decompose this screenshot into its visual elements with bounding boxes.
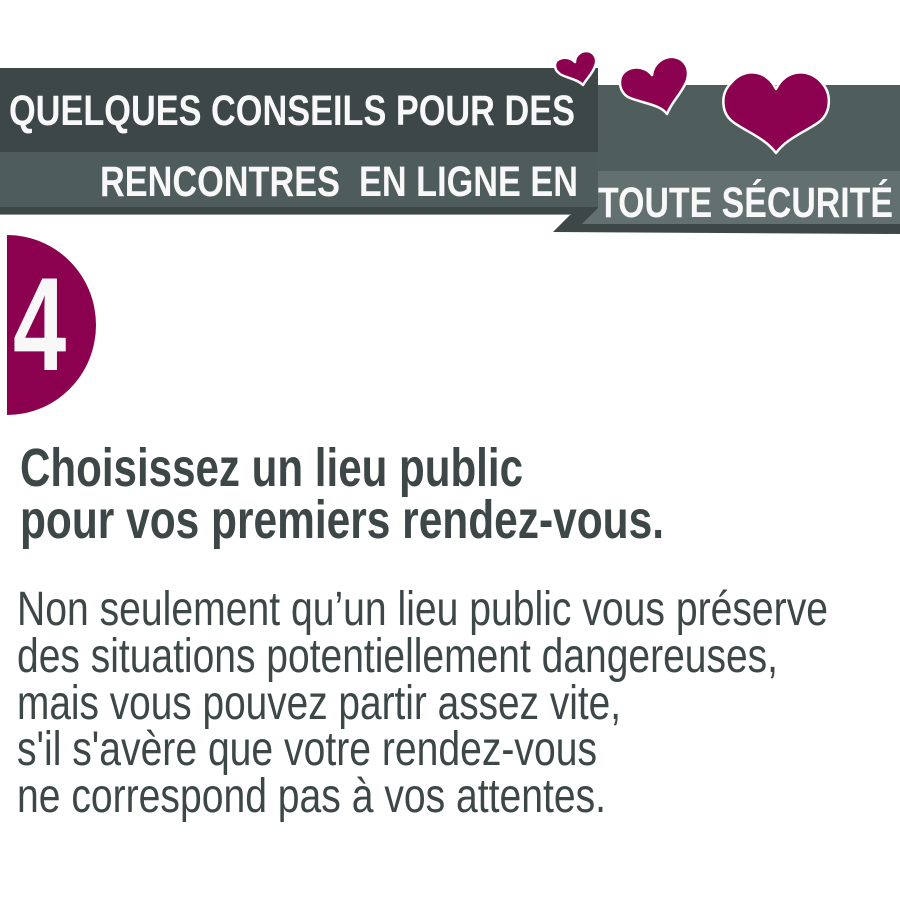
header ribbon xyxy=(0,68,900,234)
ribbon lower edge xyxy=(0,207,598,224)
icon: large heart xyxy=(723,72,829,153)
tip title: pour vos premiers rendez-vous. xyxy=(20,490,664,550)
tip body text: ne correspond pas à vos attentes. xyxy=(17,770,606,823)
heading line one: QUELQUES CONSEILS POUR DES xyxy=(9,87,575,135)
number badge xyxy=(7,235,96,415)
ribbon top dark band xyxy=(0,68,598,152)
ribbon edge highlight xyxy=(0,214,571,215)
tip title xyxy=(20,438,664,550)
badge half circle xyxy=(7,235,96,415)
ribbon second band xyxy=(0,152,598,207)
ribbon back band xyxy=(590,85,900,175)
ribbon fold shadow xyxy=(553,205,900,234)
icon: small heart xyxy=(555,51,596,85)
tip body text xyxy=(17,583,828,823)
ribbon back light band xyxy=(582,171,900,224)
icon: medium heart xyxy=(620,57,688,114)
badge numeral: 4 xyxy=(13,249,66,399)
tip body text: mais vous pouvez partir assez vite, xyxy=(17,677,621,730)
tip title: Choisissez un lieu public xyxy=(20,438,523,498)
tip body text: s'il s'avère que votre rendez-vous xyxy=(17,723,597,776)
heading line two: RENCONTRES EN LIGNE EN xyxy=(100,158,578,206)
